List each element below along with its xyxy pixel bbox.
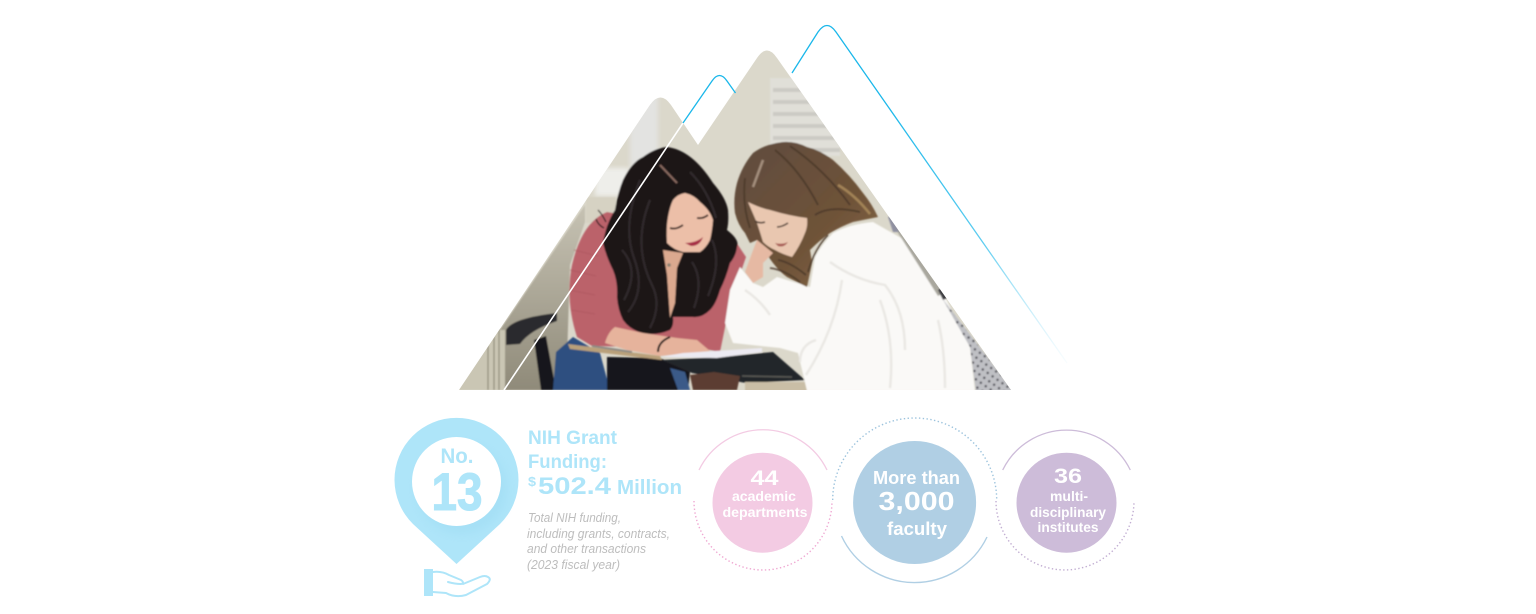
NIH grant heading: Million [617, 477, 682, 499]
large blue peak line [792, 26, 1067, 363]
NIH grant heading: 502.4 [538, 473, 612, 500]
wall details [459, 78, 840, 390]
NIH funding description: and other transactions [527, 541, 646, 556]
NIH grant heading: $ [528, 474, 537, 489]
small blue peak line [683, 76, 736, 123]
hand at chin [745, 240, 773, 283]
photo: two students reading a clipboard, in mountain silhouette [450, 30, 1020, 395]
map pin badge [394, 418, 518, 564]
forearm and hand [605, 327, 710, 356]
NIH grant heading: NIH Grant [528, 427, 617, 449]
stat: more than 3,000 faculty: faculty [887, 519, 947, 539]
woman right: hair [734, 142, 878, 287]
woman right: face [748, 202, 807, 257]
NIH funding description [527, 510, 670, 572]
woman left: neck and chest [663, 250, 683, 318]
map pin badge: 13 [432, 463, 482, 522]
dark trousers [607, 357, 690, 390]
jeans [553, 337, 610, 390]
woman right: shirt [725, 222, 975, 391]
stat: 44 academic departments [694, 430, 832, 570]
chair back [942, 298, 1014, 392]
NIH grant heading: Funding: [528, 451, 607, 473]
icon: open hand [424, 569, 490, 596]
stat: 36 multi-disciplinary institutes: institutes [1038, 519, 1099, 535]
stat: 36 multi-disciplinary institutes: 36 [1054, 465, 1082, 488]
stat: 44 academic departments: academic [732, 488, 796, 504]
woman left: face [667, 193, 713, 252]
stat: 44 academic departments: departments [722, 504, 808, 520]
stat: 36 multi-disciplinary institutes: multi- [1050, 488, 1088, 504]
pin text: No. [440, 445, 474, 468]
NIH funding description: including grants, contracts, [527, 526, 670, 541]
stat: 36 multi-disciplinary institutes [996, 430, 1134, 570]
NIH grant heading [528, 427, 682, 500]
stat: more than 3,000 faculty: 3,000 [878, 486, 954, 516]
NIH funding description: (2023 fiscal year) [527, 557, 620, 572]
clipboard and paper [568, 344, 813, 391]
stat: more than 3,000 faculty: More than [873, 467, 960, 488]
woman left: cardigan [569, 212, 746, 352]
stat: more than 3,000 faculty [833, 418, 997, 583]
infographic canvas [394, 24, 1135, 598]
chair armrest [506, 313, 557, 390]
hair parting [660, 165, 677, 183]
white line over photo [504, 123, 683, 390]
woman left: hair [603, 147, 738, 334]
NIH funding description: Total NIH funding, [528, 510, 621, 525]
stat: 44 academic departments: 44 [750, 467, 779, 490]
stat: 36 multi-disciplinary institutes: disciplinary [1030, 504, 1106, 520]
